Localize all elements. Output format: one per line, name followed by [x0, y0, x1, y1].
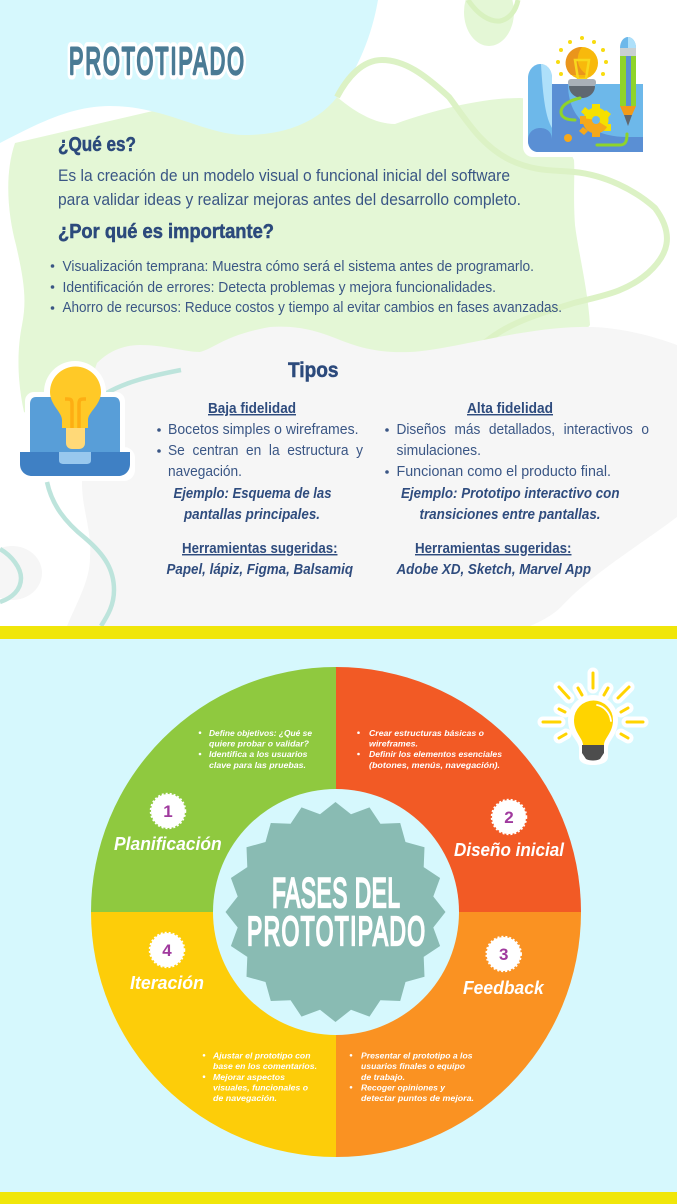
title: PROTOTIPADO [69, 40, 244, 83]
column: baja fidelidad: Baja fidelidad [208, 401, 296, 417]
text block: por que es importante [51, 221, 562, 316]
background: grey blob [67, 327, 677, 626]
text block: que es: ¿Qué es? [58, 134, 136, 156]
phase 4 content: Iteración [130, 972, 204, 993]
column: alta fidelidad: Ejemplo: Prototipo interactivo con [401, 486, 620, 502]
title: PROTOTIPADO [69, 40, 244, 83]
column: baja fidelidad: Se centran en la estructura y [168, 443, 364, 459]
text block: por que es importante: Identificación de errores: Detecta problemas y mejora funcionalidades. [62, 280, 496, 296]
phase 1 content: Identifica a los usuarios [209, 749, 308, 759]
icon: blueprint with bulb, gear and pencil [523, 36, 648, 157]
phase 4 content: base en los comentarios. [213, 1061, 317, 1071]
wheel chart: phases of prototyping [91, 667, 581, 1157]
phase 3 content: 3 [499, 945, 508, 964]
column: baja fidelidad: Bocetos simples o wireframes. [168, 422, 358, 438]
yellow band: bottom [0, 1192, 677, 1204]
phase 2 content: wireframes. [369, 738, 418, 748]
phase 2 content: 2 [504, 808, 514, 827]
text block: por que es importante: Ahorro de recursos: Reduce costos y tiempo al evitar cambios en fases avanzadas. [62, 300, 562, 316]
column: alta fidelidad: transiciones entre pantallas. [420, 507, 600, 523]
background: green blob [8, 97, 590, 430]
column: baja fidelidad [157, 401, 364, 578]
phase 4 content: visuales, funcionales o [213, 1082, 308, 1092]
heading: tipos: Tipos [288, 359, 338, 382]
segment 2: diseno inicial [336, 667, 581, 912]
icon: shining light bulb [543, 673, 643, 765]
center disc [213, 789, 459, 1035]
background: teal curve lines [0, 370, 181, 626]
phase 1 content: 1 [163, 802, 173, 821]
phase 3 content [350, 936, 545, 1103]
phase 2 content: Definir los elementos esenciales [369, 749, 502, 759]
phase 3 content: de trabajo. [361, 1072, 405, 1082]
background: green curve line [337, 60, 667, 352]
section background: phases [0, 639, 677, 1192]
phase 1 content: clave para las pruebas. [209, 760, 306, 770]
background: cyan blob [0, 0, 378, 143]
text block: por que es importante: Visualización temprana: Muestra cómo será el sistema antes de programarlo. [62, 259, 534, 275]
center star badge [226, 802, 446, 1022]
phase 2 content: Diseño inicial [454, 839, 565, 860]
phase 4 content: 4 [162, 941, 172, 960]
text block: que es: para validar ideas y realizar mejoras antes del desarrollo completo. [58, 191, 521, 209]
background: top green blob [464, 0, 514, 46]
yellow band: top [0, 626, 677, 639]
phase 1 content: Planificación [114, 833, 222, 854]
text block: por que es importante: ¿Por qué es importante? [58, 221, 274, 243]
phase 2 content [357, 728, 565, 860]
phase 3 content: detectar puntos de mejora. [361, 1093, 474, 1103]
column: alta fidelidad: Diseños más detallados, interactivos o [396, 422, 649, 438]
segment 1: planificacion [91, 667, 336, 912]
text block: que es: Es la creación de un modelo visual o funcional inicial del software [58, 167, 510, 185]
center title: PROTOTIPADO [247, 909, 425, 955]
phase 3 content: Feedback [463, 977, 545, 998]
column: alta fidelidad [385, 401, 649, 578]
phase 4 content: Mejorar aspectos [213, 1072, 285, 1082]
column: alta fidelidad: simulaciones. [396, 443, 481, 459]
column: alta fidelidad: Funcionan como el producto final. [396, 464, 611, 480]
column: baja fidelidad: Herramientas sugeridas: [182, 541, 338, 557]
phase 4 content: de navegación. [213, 1093, 277, 1103]
background: small grey blob [0, 546, 42, 600]
phase 1 content: Define objetivos: ¿Qué se [209, 728, 312, 738]
column: baja fidelidad: navegación. [168, 464, 242, 480]
background: top curl line [468, 0, 518, 21]
segment 3: feedback [336, 912, 581, 1157]
column: alta fidelidad: Adobe XD, Sketch, Marvel App [396, 562, 591, 578]
phase 3 content: usuarios finales o equipo [361, 1061, 465, 1071]
phase 4 content: Ajustar el prototipo con [212, 1050, 310, 1060]
phase 1 content: quiere probar o validar? [209, 738, 310, 748]
phase 3 content: Recoger opiniones y [361, 1082, 446, 1092]
phase 3 content: Presentar el prototipo a los [361, 1050, 473, 1060]
phase 2 content: (botones, menús, navegación). [369, 760, 500, 770]
phase 4 content [130, 932, 317, 1103]
center title [247, 870, 425, 955]
center title: FASES DEL [272, 870, 400, 917]
column: baja fidelidad: Papel, lápiz, Figma, Balsamiq [166, 562, 353, 578]
column: alta fidelidad: Alta fidelidad [467, 401, 553, 417]
icon: laptop with light bulb [15, 361, 135, 481]
segment 4: iteracion [91, 912, 336, 1157]
phase 2 content: Crear estructuras básicas o [369, 728, 484, 738]
phase 1 content [114, 728, 312, 854]
text block: que es [58, 134, 521, 209]
column: baja fidelidad: Ejemplo: Esquema de las [174, 486, 332, 502]
column: baja fidelidad: pantallas principales. [183, 507, 320, 523]
column: alta fidelidad: Herramientas sugeridas: [415, 541, 572, 557]
